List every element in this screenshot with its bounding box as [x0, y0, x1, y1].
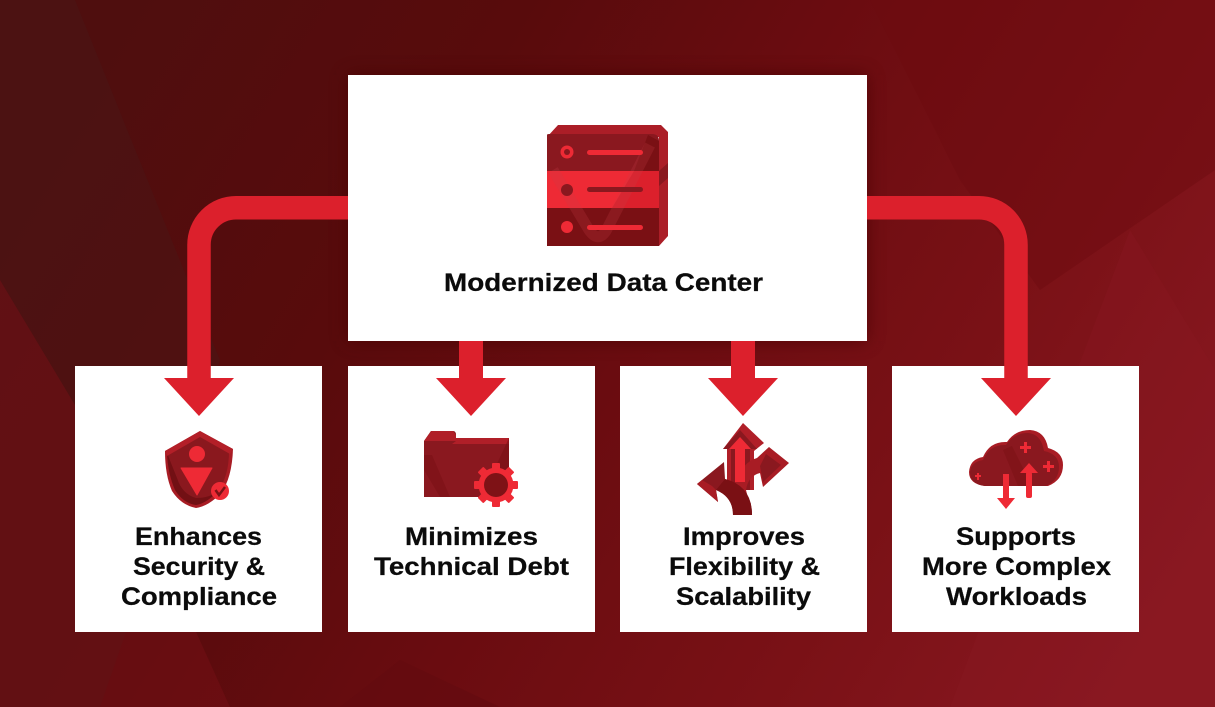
- label: Improves Flexibility & Scalability: Improves: [683, 523, 805, 551]
- label: Enhances Security & Compliance: [121, 523, 277, 611]
- arrow: centre to Improves Flexibility: [708, 341, 778, 416]
- label: Minimizes Technical Debt: [374, 523, 570, 581]
- label: Supports More Complex Workloads: Supports: [956, 523, 1076, 551]
- arrow: centre to Minimizes Technical Debt: [436, 341, 506, 416]
- label: Improves Flexibility & Scalability: [669, 523, 820, 611]
- label: Supports More Complex Workloads: More Complex: [922, 553, 1111, 581]
- label: Enhances Security & Compliance: Compliance: [121, 583, 277, 611]
- label: Enhances Security & Compliance: Enhances: [135, 523, 262, 551]
- arrow: centre to Enhances Security: [164, 208, 348, 416]
- icon: diverging arrows: [697, 423, 789, 515]
- icon: folder with gear: [424, 431, 518, 507]
- label: Supports More Complex Workloads: Workloads: [946, 583, 1087, 611]
- label: Enhances Security & Compliance: Security &: [133, 553, 265, 581]
- panel: Enhances Security & Compliance: [75, 366, 322, 632]
- label: Improves Flexibility & Scalability: Scalability: [676, 583, 811, 611]
- label: Improves Flexibility & Scalability: Flexibility &: [669, 553, 820, 581]
- label: Minimizes Technical Debt: Minimizes: [405, 523, 538, 551]
- icon: shield: [165, 431, 233, 508]
- icon: cloud with arrows: [969, 430, 1063, 509]
- heading: Modernized Data Center: Modernized Data Center: [444, 269, 763, 297]
- arrow: centre to Supports Workloads: [867, 208, 1051, 416]
- panel: Minimizes Technical Debt: [348, 366, 595, 632]
- icon: server: [547, 125, 668, 246]
- label: Supports More Complex Workloads: [922, 523, 1111, 611]
- panel: Modernized Data Center: [348, 75, 867, 341]
- panel: Improves Flexibility & Scalability: [620, 366, 867, 632]
- panel: Supports More Complex Workloads: [892, 366, 1139, 632]
- label: Minimizes Technical Debt: Technical Debt: [374, 553, 570, 581]
